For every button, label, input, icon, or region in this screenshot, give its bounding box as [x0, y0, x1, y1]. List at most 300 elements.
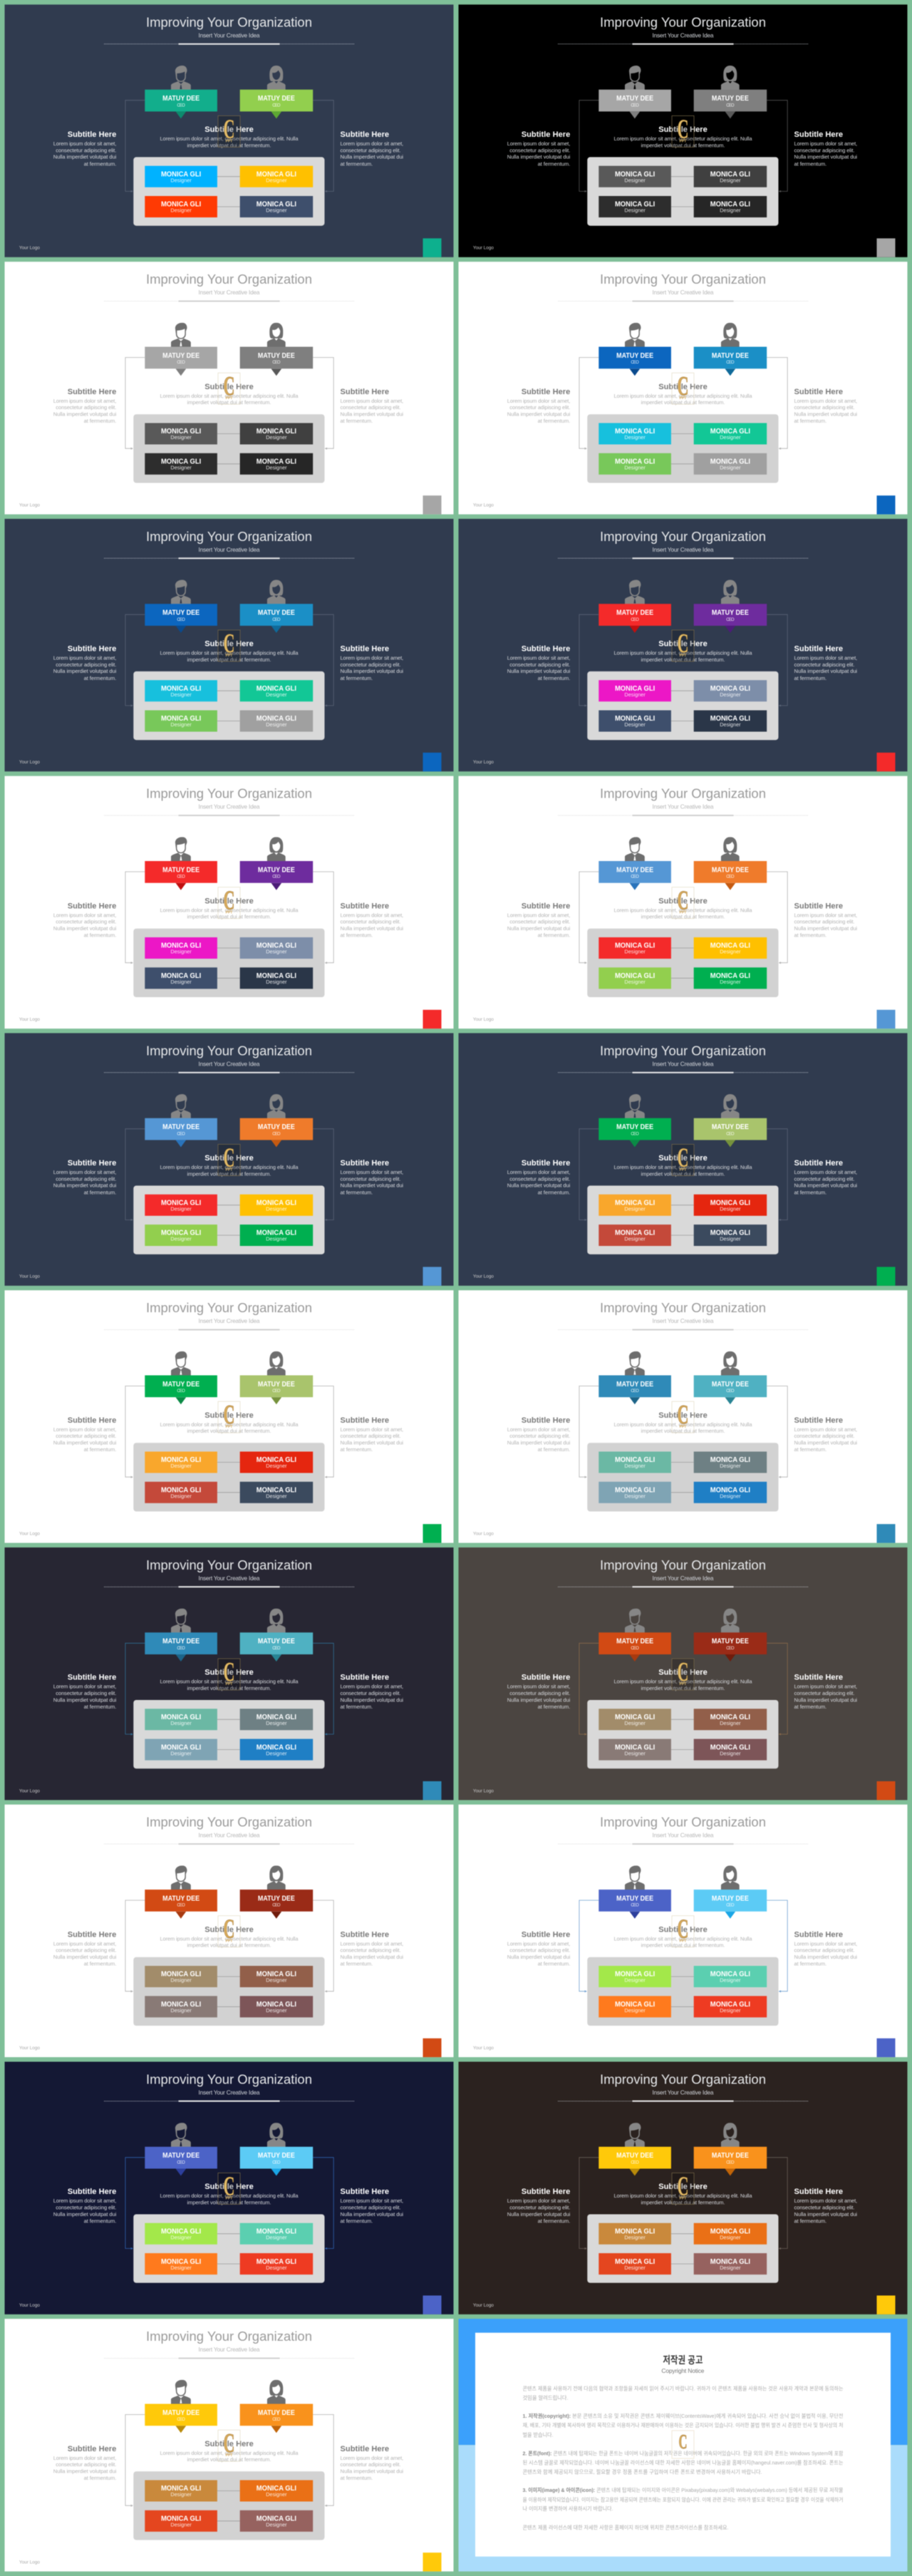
- team panel: Designer: [624, 207, 646, 214]
- accent square: [423, 1267, 442, 1286]
- icon: man: [625, 1609, 645, 1633]
- logo label: Your Logo: [473, 2046, 494, 2051]
- accent square: [876, 2039, 895, 2057]
- subtitle: Insert Your Creative Idea: [198, 546, 260, 553]
- slide 7: white red purple: [4, 776, 453, 1029]
- team panel: MONICA GLI: [161, 942, 201, 950]
- left text: at fermentum.: [538, 1189, 570, 1195]
- right text: [794, 902, 857, 939]
- icon: woman: [267, 1094, 286, 1118]
- right text: Lorem ipsum dolor sit amet,: [341, 1940, 403, 1947]
- team panel: [587, 2214, 778, 2283]
- team panel: MONICA GLI: [710, 1456, 750, 1464]
- CEO card right: MATUY DEE: [712, 351, 749, 360]
- team panel: MONICA GLI: [256, 170, 296, 178]
- center text: [160, 1154, 299, 1177]
- team panel: Designer: [170, 2491, 192, 2498]
- icon: man: [171, 837, 191, 861]
- icon: man: [171, 580, 191, 604]
- clause 3 image and icon: 3. 이미지(image) & 아이콘(icon): 콘텐츠 내에 탑재되는 이미지와 아이콘은 Pixabay(pixabay.com)와 Webalys(webalys.com) 등에서 제공된 무료 저작물: [523, 2486, 844, 2493]
- right text: Nulla imperdiet volutpat dui: [794, 1954, 857, 1960]
- right text: Nulla imperdiet volutpat dui: [794, 668, 857, 674]
- center text: [160, 383, 299, 406]
- watermark: C: [224, 629, 235, 659]
- title divider: [558, 2101, 809, 2102]
- center text: Subtitle Here: [658, 1154, 708, 1163]
- CEO card left: MATUY DEE: [616, 1637, 653, 1646]
- left text: at fermentum.: [84, 160, 116, 167]
- right text: Nulla imperdiet volutpat dui: [341, 668, 403, 674]
- team panel: MONICA GLI: [710, 1485, 750, 1494]
- left text: consectetur adipiscing elit.: [509, 404, 570, 411]
- right text: [794, 1674, 857, 1710]
- center text: [160, 640, 299, 663]
- clause 1 copyright: 벌을 받습니다.: [523, 2431, 553, 2438]
- left text: Nulla imperdiet volutpat dui: [53, 668, 117, 674]
- icon: woman: [721, 323, 740, 347]
- left text: Subtitle Here: [68, 2445, 116, 2453]
- right text: consectetur adipiscing elit.: [341, 919, 400, 925]
- CEO card right: CEO: [726, 361, 735, 365]
- team panel: MONICA GLI: [161, 1970, 201, 1979]
- right text: Nulla imperdiet volutpat dui: [341, 154, 403, 160]
- watermark: PPT: [680, 654, 686, 658]
- team panel: MONICA GLI: [161, 714, 201, 723]
- team panel: Designer: [170, 207, 192, 214]
- logo label: Your Logo: [473, 1788, 494, 1793]
- left text: at fermentum.: [84, 1961, 116, 1967]
- left text: Nulla imperdiet volutpat dui: [507, 925, 571, 932]
- CEO card right: CEO: [272, 103, 281, 108]
- left text: [53, 1416, 117, 1453]
- right text: Lorem ipsum dolor sit amet,: [794, 655, 857, 661]
- CEO card right: [694, 1632, 767, 1661]
- team panel: MONICA GLI: [710, 684, 750, 693]
- team panel: Designer: [266, 2234, 287, 2241]
- accent square: [876, 1267, 895, 1286]
- CEO card right: [240, 1118, 313, 1147]
- title divider: [558, 43, 809, 45]
- right text: Nulla imperdiet volutpat dui: [794, 1439, 857, 1446]
- logo label: Your Logo: [19, 503, 40, 508]
- team panel: MONICA GLI: [615, 458, 655, 466]
- CEO card left: CEO: [631, 103, 639, 108]
- team panel: Designer: [170, 1205, 192, 1212]
- title divider: [104, 1072, 355, 1073]
- team panel: Designer: [624, 2007, 646, 2014]
- team panel: Designer: [170, 177, 192, 183]
- icon: woman: [267, 580, 286, 604]
- CEO card right: [694, 346, 767, 376]
- right text: at fermentum.: [341, 2218, 373, 2224]
- CEO card left: MATUY DEE: [616, 351, 653, 360]
- slide 3: white gray: [4, 262, 453, 515]
- watermark: PPT: [680, 2197, 686, 2201]
- icon: man: [171, 66, 191, 90]
- team panel: Designer: [170, 1977, 192, 1984]
- right text: Subtitle Here: [794, 902, 843, 910]
- right text: [341, 644, 403, 681]
- icon: woman: [721, 580, 740, 604]
- team panel: Designer: [624, 1977, 646, 1984]
- CEO card left: [598, 2147, 671, 2175]
- team panel: Designer: [266, 2265, 287, 2271]
- slide 14: taupe rust: [459, 1547, 908, 1800]
- icon: woman: [721, 2123, 740, 2147]
- team panel: MONICA GLI: [256, 2000, 296, 2009]
- center text: Lorem ipsum dolor sit amet, consectetur adipiscing elit. Nulla: [160, 650, 299, 656]
- right text: consectetur adipiscing elit.: [341, 147, 400, 153]
- icon: man: [171, 2123, 191, 2147]
- clause 3 image and icon: [523, 2486, 844, 2512]
- left text: Subtitle Here: [68, 902, 116, 910]
- team panel: MONICA GLI: [256, 2227, 296, 2235]
- logo label: Your Logo: [19, 2046, 40, 2051]
- team panel: [133, 1957, 325, 2026]
- CEO card left: CEO: [631, 1647, 639, 1651]
- CEO card left: [598, 1376, 671, 1404]
- team panel: Designer: [266, 1236, 287, 1242]
- center text: [160, 1411, 299, 1434]
- right text: [341, 2188, 403, 2224]
- slide 15: white rust: [4, 1805, 453, 2057]
- CEO card left: MATUY DEE: [162, 1380, 200, 1389]
- right text: Nulla imperdiet volutpat dui: [341, 1183, 403, 1189]
- center text: imperdiet volutpat dui at fermentum.: [641, 1170, 725, 1177]
- center text: imperdiet volutpat dui at fermentum.: [187, 1685, 271, 1691]
- CEO card left: MATUY DEE: [162, 2408, 200, 2417]
- CEO card right: CEO: [726, 1647, 735, 1651]
- title divider: [104, 2358, 355, 2359]
- icon: man: [171, 2380, 191, 2404]
- watermark: C: [677, 886, 688, 916]
- slide 2: black gray: [459, 4, 908, 257]
- team panel: MONICA GLI: [710, 1229, 750, 1237]
- connector arrows: [125, 2158, 333, 2250]
- team panel: MONICA GLI: [710, 942, 750, 950]
- watermark: C: [224, 1400, 235, 1430]
- team panel: Designer: [720, 721, 741, 728]
- right text: consectetur adipiscing elit.: [341, 2461, 400, 2468]
- slide 18: dark brown amber: [459, 2061, 908, 2314]
- CEO card left: [145, 1376, 217, 1404]
- center text: Subtitle Here: [204, 1925, 254, 1934]
- team panel: MONICA GLI: [256, 1198, 296, 1207]
- right text: at fermentum.: [794, 1189, 826, 1195]
- center text: [160, 2440, 299, 2463]
- clause 2 font: 콘텐츠와 함께 제공되지 않으므로, 필요할 경우 정품 폰트를 구입하여 다른 폰트로 변경하여 사용하시기 바랍니다.: [523, 2468, 762, 2475]
- connector arrows: [579, 1129, 787, 1221]
- team panel: Designer: [624, 979, 646, 985]
- left text: Nulla imperdiet volutpat dui: [507, 668, 571, 674]
- right text: consectetur adipiscing elit.: [341, 661, 400, 668]
- team panel: MONICA GLI: [161, 684, 201, 693]
- CEO card left: MATUY DEE: [162, 1894, 200, 1902]
- slide 4: white blue: [459, 262, 908, 515]
- right text: Nulla imperdiet volutpat dui: [341, 1439, 403, 1446]
- accent square: [876, 1781, 895, 1800]
- watermark: [218, 1657, 240, 1690]
- watermark: C: [224, 886, 235, 916]
- center text: Lorem ipsum dolor sit amet, consectetur adipiscing elit. Nulla: [160, 135, 299, 142]
- right text: Nulla imperdiet volutpat dui: [341, 2468, 403, 2474]
- team panel: Designer: [720, 1463, 741, 1469]
- left text: Nulla imperdiet volutpat dui: [507, 1183, 571, 1189]
- left text: [507, 130, 571, 167]
- right text: Nulla imperdiet volutpat dui: [794, 154, 857, 160]
- watermark: PPT: [226, 2197, 232, 2201]
- center text: [160, 2183, 299, 2205]
- team panel: Designer: [624, 2265, 646, 2271]
- team panel: Designer: [624, 434, 646, 441]
- right text: Lorem ipsum dolor sit amet,: [341, 1426, 403, 1433]
- title divider: [558, 557, 809, 559]
- center text: Subtitle Here: [204, 2440, 254, 2448]
- CEO card left: [598, 1890, 671, 1919]
- subtitle: Insert Your Creative Idea: [198, 31, 260, 38]
- watermark: PPT: [226, 1425, 232, 1429]
- watermark: [218, 1400, 240, 1433]
- title divider: [104, 301, 355, 302]
- CEO card right: MATUY DEE: [258, 94, 295, 103]
- left text: Subtitle Here: [522, 1159, 570, 1168]
- accent square: [876, 495, 895, 515]
- CEO card left: MATUY DEE: [616, 1123, 653, 1131]
- watermark: [218, 629, 240, 661]
- accent square: [876, 753, 895, 771]
- accent square: [423, 1010, 442, 1029]
- team panel: [133, 929, 325, 997]
- team panel: MONICA GLI: [710, 427, 750, 436]
- subtitle: Insert Your Creative Idea: [198, 2088, 260, 2096]
- right text: consectetur adipiscing elit.: [794, 661, 855, 668]
- right text: Subtitle Here: [794, 388, 843, 396]
- team panel: Designer: [624, 949, 646, 955]
- CEO card right: [694, 1118, 767, 1147]
- team panel: Designer: [624, 1236, 646, 1242]
- title: Improving Your Organization: [146, 272, 312, 287]
- CEO card left: CEO: [631, 2161, 639, 2165]
- left text: Subtitle Here: [68, 1416, 116, 1425]
- title: Improving Your Organization: [600, 786, 766, 801]
- right text: Lorem ipsum dolor sit amet,: [794, 912, 857, 918]
- CEO card right: [694, 1890, 767, 1919]
- watermark: C: [677, 1657, 688, 1687]
- clause 2 font: 2. 폰트(font): 콘텐츠 내에 탑재되는 한글 폰트는 네이버 나눔글꼴의 저작권은 네이버에 귀속되어있습니다. 한글 외의 로마 폰트는 Windows System에 포함: [523, 2449, 844, 2456]
- connector arrows: [125, 872, 333, 964]
- connector arrows: [579, 358, 787, 450]
- title divider: [104, 1586, 355, 1587]
- CEO card right: MATUY DEE: [258, 2408, 295, 2417]
- right text: Lorem ipsum dolor sit amet,: [341, 912, 403, 918]
- icon: woman: [267, 837, 286, 861]
- CEO card right: [694, 604, 767, 633]
- center text: Lorem ipsum dolor sit amet, consectetur adipiscing elit. Nulla: [160, 393, 299, 399]
- watermark: PPT: [680, 1682, 686, 1686]
- center text: imperdiet volutpat dui at fermentum.: [187, 2456, 271, 2463]
- connector arrows: [125, 358, 333, 450]
- connector arrows: [125, 1129, 333, 1221]
- CEO card right: MATUY DEE: [258, 1637, 295, 1646]
- team panel: MONICA GLI: [256, 458, 296, 466]
- logo label: Your Logo: [473, 503, 494, 508]
- team panel: MONICA GLI: [615, 2000, 655, 2009]
- team panel: MONICA GLI: [615, 1743, 655, 1751]
- icon: man: [171, 1351, 191, 1376]
- team panel: MONICA GLI: [256, 1229, 296, 1237]
- logo label: Your Logo: [19, 2560, 40, 2565]
- team panel: MONICA GLI: [161, 170, 201, 178]
- team panel: Designer: [266, 949, 287, 955]
- left text: Nulla imperdiet volutpat dui: [53, 1696, 117, 1703]
- center text: imperdiet volutpat dui at fermentum.: [187, 914, 271, 920]
- team panel: MONICA GLI: [161, 972, 201, 980]
- right text: consectetur adipiscing elit.: [341, 1690, 400, 1696]
- center text: imperdiet volutpat dui at fermentum.: [641, 1685, 725, 1691]
- connector arrows: [579, 614, 787, 706]
- team panel: Designer: [266, 434, 287, 441]
- watermark: [672, 2431, 694, 2458]
- accent square: [423, 1781, 442, 1800]
- team panel: [587, 1700, 778, 1768]
- watermark: PPT: [680, 1168, 686, 1172]
- left text: at fermentum.: [538, 2218, 570, 2224]
- watermark: [218, 1143, 240, 1175]
- watermark: [672, 2171, 694, 2204]
- CEO card right: CEO: [726, 1132, 735, 1136]
- team panel: Designer: [170, 465, 192, 470]
- team panel: MONICA GLI: [256, 1743, 296, 1751]
- icon: woman: [267, 2123, 286, 2147]
- intro paragraph: 콘텐츠 제품을 사용하기 전에 다음의 협약과 조항들을 자세히 읽어 주시기 바랍니다. 귀하가 이 콘텐츠 제품을 사용하는 것은 사용자 계약과 본문에 동의하는: [523, 2384, 844, 2391]
- left text: consectetur adipiscing elit.: [509, 2204, 570, 2211]
- team panel: MONICA GLI: [161, 200, 201, 209]
- right text: [794, 1159, 857, 1195]
- right text: Lorem ipsum dolor sit amet,: [794, 1684, 857, 1690]
- CEO card right: [694, 1376, 767, 1404]
- left text: [507, 388, 571, 424]
- watermark: PPT: [226, 396, 232, 401]
- subtitle: Insert Your Creative Idea: [198, 2346, 260, 2353]
- right text: [341, 388, 403, 424]
- right text: Nulla imperdiet volutpat dui: [341, 1696, 403, 1703]
- left text: Subtitle Here: [68, 1159, 116, 1168]
- right text: consectetur adipiscing elit.: [341, 1175, 400, 1182]
- logo label: Your Logo: [19, 1531, 40, 1536]
- left text: Lorem ipsum dolor sit amet,: [53, 1169, 116, 1175]
- right text: Subtitle Here: [794, 1674, 843, 1682]
- CEO card right: MATUY DEE: [258, 1894, 295, 1902]
- clause 3 image and icon: 나 이미지를 변경하여 사용하시기 바랍니다.: [523, 2505, 613, 2512]
- left text: at fermentum.: [84, 1704, 116, 1710]
- CEO card left: CEO: [177, 1132, 185, 1136]
- watermark: C: [677, 1143, 688, 1173]
- watermark: [218, 114, 240, 147]
- right text: at fermentum.: [794, 1446, 826, 1453]
- watermark: C: [677, 371, 688, 401]
- CEO card right: MATUY DEE: [712, 865, 749, 874]
- team panel: Designer: [624, 1720, 646, 1726]
- slide 10: navy green olive: [459, 1033, 908, 1286]
- CEO card left: [598, 346, 671, 376]
- right text: Lorem ipsum dolor sit amet,: [341, 2198, 403, 2204]
- watermark: [218, 886, 240, 919]
- team panel: Designer: [266, 1977, 287, 1984]
- right text: Lorem ipsum dolor sit amet,: [794, 398, 857, 404]
- connector arrows: [125, 2415, 333, 2507]
- title: Improving Your Organization: [600, 1043, 766, 1058]
- watermark: [672, 629, 694, 661]
- accent square: [423, 495, 442, 515]
- title divider: [104, 815, 355, 816]
- right text: Subtitle Here: [794, 1416, 843, 1425]
- CEO card left: CEO: [177, 1904, 185, 1908]
- team panel: MONICA GLI: [615, 170, 655, 178]
- subtitle: Insert Your Creative Idea: [653, 1317, 714, 1324]
- team panel: Designer: [720, 2265, 741, 2271]
- CEO card left: CEO: [631, 361, 639, 365]
- title divider: [558, 301, 809, 302]
- title: Improving Your Organization: [600, 1815, 766, 1830]
- watermark: [218, 371, 240, 404]
- logo label: Your Logo: [19, 1788, 40, 1793]
- accent square: [876, 2295, 895, 2314]
- logo label: Your Logo: [19, 246, 40, 251]
- team panel: Designer: [624, 721, 646, 728]
- left text: Nulla imperdiet volutpat dui: [507, 411, 571, 418]
- title: Improving Your Organization: [600, 272, 766, 287]
- CEO card right: [694, 861, 767, 890]
- watermark: C: [677, 1915, 688, 1944]
- right text: consectetur adipiscing elit.: [794, 404, 855, 411]
- right text: Nulla imperdiet volutpat dui: [341, 2211, 403, 2217]
- right text: [794, 644, 857, 681]
- CEO card right: MATUY DEE: [712, 609, 749, 617]
- right text: Subtitle Here: [341, 1416, 389, 1425]
- team panel: Designer: [624, 691, 646, 698]
- accent square: [423, 2039, 442, 2057]
- center text: imperdiet volutpat dui at fermentum.: [187, 142, 271, 148]
- team panel: [587, 1185, 778, 1254]
- left text: Lorem ipsum dolor sit amet,: [53, 1684, 116, 1690]
- subtitle: Insert Your Creative Idea: [198, 803, 260, 810]
- watermark: PPT: [680, 396, 686, 401]
- CEO card right: CEO: [272, 1132, 281, 1136]
- right text: [794, 1416, 857, 1453]
- connector arrows: [125, 1900, 333, 1992]
- team panel: Designer: [720, 1493, 741, 1499]
- team panel: Designer: [170, 979, 192, 985]
- right text: Subtitle Here: [341, 1930, 389, 1939]
- team panel: Designer: [266, 1493, 287, 1499]
- right text: at fermentum.: [341, 1189, 373, 1195]
- CEO card left: [598, 1632, 671, 1661]
- left text: [53, 2445, 117, 2481]
- CEO card right: MATUY DEE: [712, 1894, 749, 1902]
- watermark: [672, 114, 694, 147]
- right text: Lorem ipsum dolor sit amet,: [794, 140, 857, 147]
- watermark: C: [677, 1400, 688, 1430]
- accent square: [423, 2295, 442, 2314]
- right text: Subtitle Here: [794, 1159, 843, 1168]
- left text: [507, 1416, 571, 1453]
- team panel: MONICA GLI: [256, 1456, 296, 1464]
- center text: imperdiet volutpat dui at fermentum.: [641, 142, 725, 148]
- CEO card left: MATUY DEE: [616, 2151, 653, 2160]
- icon: woman: [721, 66, 740, 90]
- team panel: [133, 2471, 325, 2540]
- intro paragraph: 것임을 알려드립니다.: [523, 2394, 569, 2401]
